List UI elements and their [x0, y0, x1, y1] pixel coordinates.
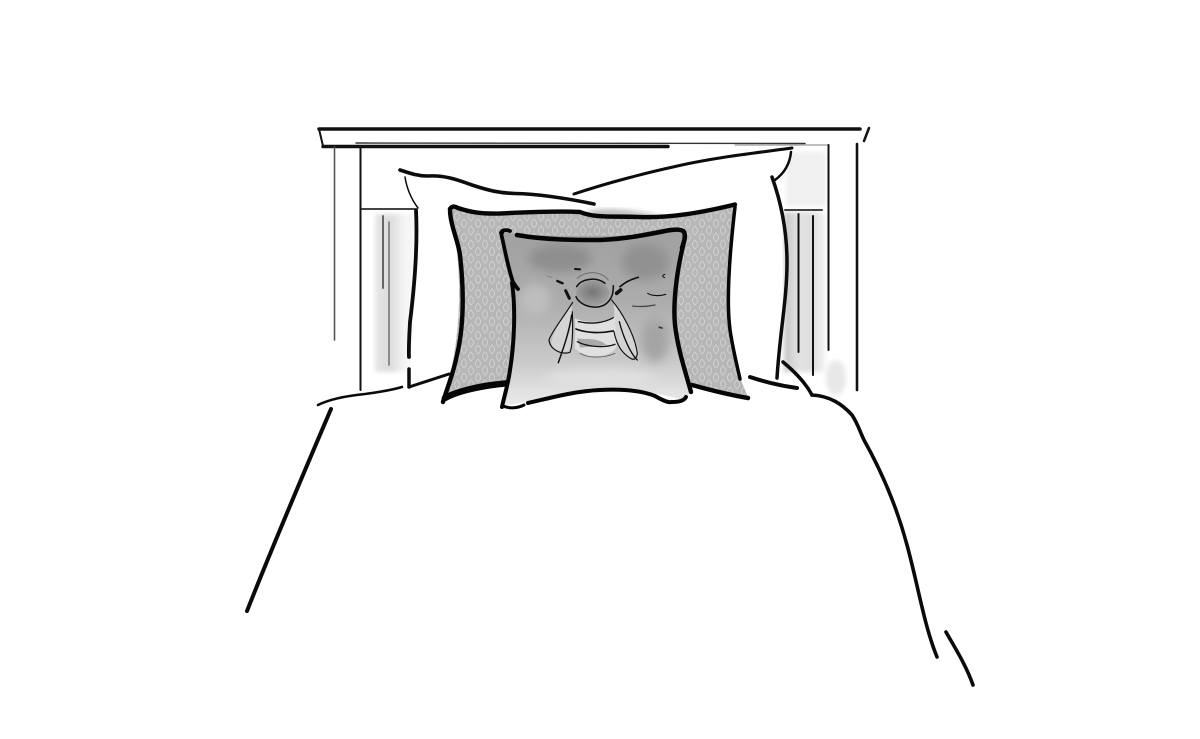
bee body	[575, 317, 617, 356]
duvet outline	[247, 362, 973, 685]
back pillows	[400, 148, 792, 390]
front pillow wash patches	[519, 244, 669, 387]
icon: bee	[547, 269, 666, 363]
front bee pillow	[501, 230, 691, 408]
right post	[785, 144, 857, 390]
left post	[334, 147, 414, 390]
front pillow outline	[501, 230, 691, 408]
right back pillow outline	[574, 148, 792, 378]
headboard wash shading	[375, 152, 846, 396]
bee head shading	[576, 281, 609, 306]
medium pillow shadow	[585, 209, 665, 218]
pillow fill	[400, 150, 790, 390]
medium pillow outline	[443, 204, 748, 402]
headboard top rail	[319, 128, 869, 146]
left back pillow outline	[400, 170, 594, 387]
bee wing glow	[551, 300, 637, 357]
headboard	[319, 128, 869, 396]
medium patterned pillow	[443, 204, 748, 402]
front pillow fill	[502, 230, 690, 406]
medium pillow fill	[445, 204, 748, 398]
bee line work	[547, 269, 666, 363]
